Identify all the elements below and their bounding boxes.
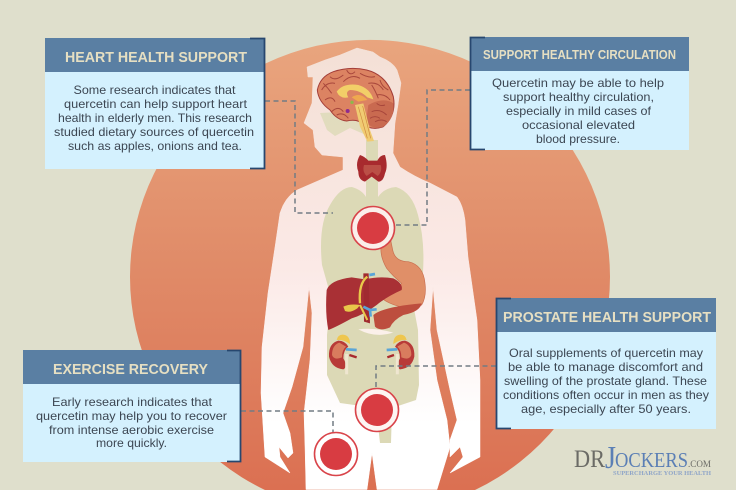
text: exercise body: quercetin may help you to recover bbox=[36, 409, 227, 423]
text: prostate body: age, especially after 50 years. bbox=[521, 402, 691, 416]
heading: support healthy circulation: SUPPORT HEALTHY CIRCULATION bbox=[483, 47, 676, 62]
heading: prostate health support: PROSTATE HEALTH SUPPORT bbox=[503, 310, 711, 326]
text: prostate body: conditions often occur in men as they bbox=[503, 388, 709, 402]
heading: exercise recovery: EXERCISE RECOVERY bbox=[53, 362, 208, 378]
organ: brain bbox=[317, 68, 394, 142]
organs: kidneys bbox=[329, 335, 414, 374]
panel: heart health support bbox=[45, 38, 265, 169]
text: exercise body bbox=[36, 395, 227, 450]
text: heart health body bbox=[54, 83, 254, 153]
green airway and digestive area bbox=[320, 112, 423, 443]
text: prostate body: be able to manage discomfort and bbox=[508, 360, 703, 374]
panel: exercise recovery bbox=[23, 350, 241, 462]
text: prostate body bbox=[503, 346, 709, 416]
text: exercise body: from intense aerobic exercise bbox=[49, 423, 214, 437]
logo: DrJockers.com: OCKERS bbox=[615, 448, 688, 472]
text: exercise body: Early research indicates that bbox=[52, 395, 213, 409]
panel: prostate health support bbox=[496, 298, 716, 429]
background circle bbox=[130, 40, 610, 490]
text: circulation body: support healthy circulation, bbox=[503, 90, 654, 104]
text: heart health body: studied dietary sources of quercetin bbox=[54, 125, 254, 139]
text: circulation body: occasional elevated bbox=[522, 118, 635, 132]
text: circulation body bbox=[492, 76, 664, 146]
marker: prostate bbox=[356, 388, 398, 432]
text: heart health body: quercetin can help support heart bbox=[64, 97, 248, 111]
logo: DrJockers.com: J bbox=[605, 439, 616, 475]
organ: thyroid bbox=[357, 155, 387, 182]
text: circulation body: especially in mild cases of bbox=[506, 104, 652, 118]
body silhouette bbox=[261, 48, 480, 490]
logo: DrJockers.com: SUPERCHARGE YOUR HEALTH bbox=[613, 470, 711, 477]
text: heart health body: such as apples, onions and tea. bbox=[68, 139, 242, 153]
text: prostate body: Oral supplements of quercetin may bbox=[509, 346, 703, 360]
text: circulation body: blood pressure. bbox=[536, 132, 620, 146]
text: circulation body: Quercetin may be able to help bbox=[492, 76, 664, 90]
text: heart health body: health in elderly men. This research bbox=[58, 111, 252, 125]
heading: heart health support: HEART HEALTH SUPPORT bbox=[65, 50, 247, 66]
dashed connectors bbox=[241, 90, 496, 438]
text: exercise body: more quickly. bbox=[96, 436, 167, 450]
panel: support healthy circulation bbox=[470, 37, 689, 150]
logo: DrJockers.com: DR bbox=[574, 446, 605, 473]
text: heart health body: Some research indicates that bbox=[74, 83, 236, 97]
marker: muscle bbox=[314, 432, 358, 476]
logo: DrJockers.com bbox=[574, 439, 712, 477]
text: prostate body: swelling of the prostate gland. These bbox=[504, 374, 707, 388]
organs: liver, stomach and pancreas bbox=[326, 240, 425, 335]
logo: DrJockers.com: .COM bbox=[688, 460, 712, 470]
marker: heart bbox=[352, 206, 394, 250]
